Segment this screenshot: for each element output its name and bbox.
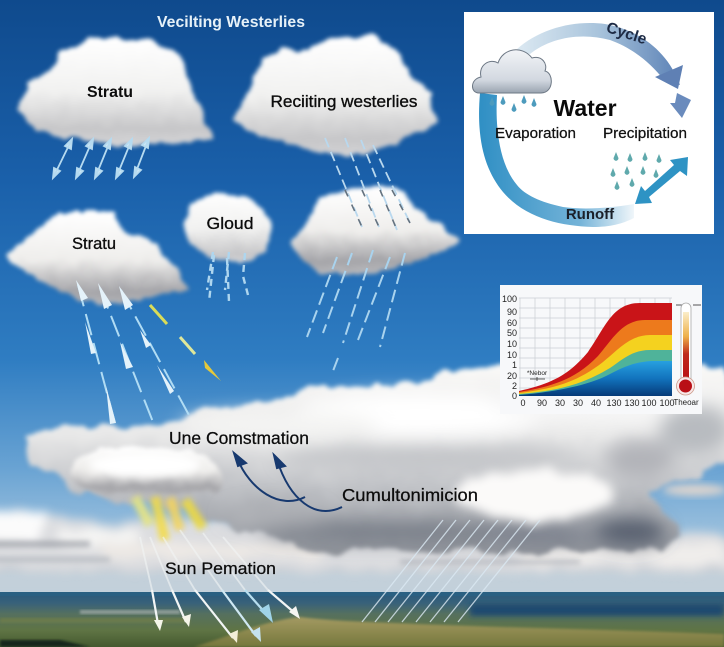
icon: thermometer [673,303,701,407]
chart axis and tick labels [502,294,517,401]
cloud: centre right [290,187,460,274]
icon: rain drops [611,152,661,190]
label: Reciiting westerlies: Reciiting westerlies [270,92,418,111]
rain streaks from top centre cloud [325,138,410,230]
white sun arrows [140,530,268,590]
cloud bank: large cumulonimbus [20,360,724,552]
chart axis and tick labels: 10 [507,350,517,360]
panel: temperature chart: 130 [624,398,640,408]
label: Evaporation: Evaporation [495,126,576,142]
curved arrows [234,453,342,511]
right side anvil streak [663,484,724,496]
chart note [527,370,548,381]
lower cloud layers [0,510,724,594]
chart axis and tick labels: 90 [507,307,517,317]
low front cloud [70,445,224,495]
chart axis and tick labels: 1 [512,360,517,370]
rain arrows under top left cloud [53,138,149,178]
panel: temperature chart: 0 [520,398,526,408]
panel: temperature chart: 90 [537,398,547,408]
rain under Gloud [207,252,248,302]
arrow: double headed [635,157,688,204]
label: Water: Water [553,95,617,121]
arrows under left Stratu cloud [76,280,221,424]
chart axis and tick labels: 100 [502,294,517,304]
yellow sun arrows [150,305,221,381]
panel: temperature chart: 30 [573,398,583,408]
label: Cycle: Cycle [604,19,649,48]
right lower rain streaks [362,520,540,622]
panel: temperature chart: 30 [555,398,565,408]
chart axis and tick labels: 60 [507,318,517,328]
label: Une Comstmation: Une Comstmation [169,428,309,448]
label: Stratu left: Stratu [72,235,116,253]
chart note: *Nebor [527,370,548,377]
chart axis and tick labels: 50 [507,328,517,338]
panel: temperature chart: 100 [659,398,675,408]
label: Gloud: Gloud [206,214,254,233]
label: Precipitation: Precipitation [603,126,687,142]
chart grid [519,298,672,396]
chart axis and tick labels: 20 [507,371,517,381]
chart bands [519,303,672,396]
cloud: top centre Reciiting westerlies [234,35,437,157]
panel: temperature chart: 100 [641,398,657,408]
panel: temperature chart [500,285,702,414]
icon: thermometer: Theoar [673,398,699,407]
panel: water cycle [464,12,714,234]
cloud: top left Stratu [17,38,212,145]
sun rays [135,497,300,643]
arrow: Cycle arc [516,23,691,118]
label: Runoff: Runoff [566,206,615,223]
cloud: left Stratu [5,212,189,306]
label: Stratu top: Stratu [87,84,133,101]
title: Vecilting Westerlies [157,14,305,31]
chart axis and tick labels: 10 [507,339,517,349]
panel: temperature chart: 130 [606,398,622,408]
icon: cloud with rain [472,50,551,112]
panel: temperature chart: 40 [591,398,601,408]
chart axis and tick labels: 2 [512,381,517,391]
chart axis and tick labels: 0 [512,391,517,401]
ground: horizon and landscape [0,592,724,647]
label: Cumultonimicion: Cumultonimicion [342,485,478,505]
rain streaks under centre right cloud [307,250,405,371]
label: Sun Pemation: Sun Pemation [165,559,276,578]
arrow: Runoff arc [479,93,634,227]
cloud: Gloud [184,192,272,265]
